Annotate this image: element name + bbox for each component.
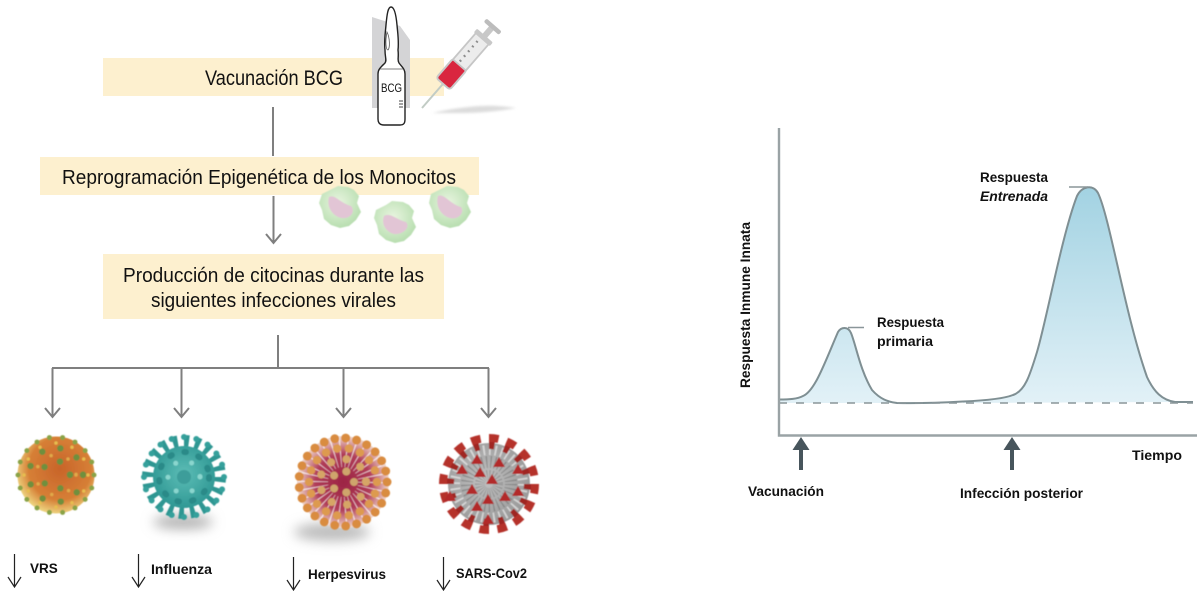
box: Producción de citocinas: siguientes infecciones virales bbox=[151, 290, 396, 312]
chart: innate immune response over time bbox=[738, 128, 1197, 501]
y-axis label: Respuesta Inmune Innata bbox=[738, 222, 753, 388]
label: Herpesvirus bbox=[287, 557, 386, 590]
label: respuesta primaria: primaria bbox=[877, 334, 934, 349]
box: Producción de citocinas: Producción de citocinas durante las bbox=[123, 265, 424, 287]
arrow: reprogramming to cytokines bbox=[266, 196, 281, 243]
label: Herpesvirus: Herpesvirus bbox=[308, 567, 386, 582]
label: tiempo: Tiempo bbox=[1132, 448, 1182, 463]
label: VRS: VRS bbox=[30, 561, 58, 576]
box: Reprogramación Epigenética: Reprogramación Epigenética de los Monocitos bbox=[62, 166, 456, 189]
label: infección posterior: Infección posterior bbox=[960, 486, 1084, 501]
arrow: infección bbox=[1004, 437, 1020, 470]
box: Reprogramación Epigenética bbox=[40, 157, 479, 195]
label: SARS-Cov2 bbox=[437, 557, 527, 590]
label: respuesta entrenada: Respuesta bbox=[980, 170, 1048, 185]
arrow tree: cytokines to viruses bbox=[45, 335, 496, 417]
label: respuesta primaria bbox=[877, 315, 944, 349]
icon: BCG ampoule bbox=[372, 7, 410, 125]
box: Vacunación BCG bbox=[103, 58, 444, 96]
line: response curve bbox=[779, 187, 1193, 403]
leaders: peak ticks bbox=[848, 187, 1088, 328]
icon: VRS virus bbox=[18, 436, 94, 514]
label: vacunación: Vacunación bbox=[748, 484, 824, 499]
box: Vacunación BCG: Vacunación BCG bbox=[205, 67, 343, 90]
icon: monocytes bbox=[319, 186, 471, 243]
icon: SARS-CoV-2 virus bbox=[443, 438, 535, 530]
arrow: vacunación bbox=[792, 437, 810, 470]
area: response under curve bbox=[779, 187, 1175, 403]
label: Influenza bbox=[132, 554, 212, 587]
label: Influenza: Influenza bbox=[151, 562, 212, 577]
label: respuesta primaria: Respuesta bbox=[877, 315, 944, 330]
icon: herpesvirus bbox=[294, 436, 389, 541]
line: baseline bbox=[779, 402, 1193, 404]
icon: influenza virus bbox=[144, 437, 224, 529]
icon: syringe bbox=[414, 18, 516, 115]
label: respuesta entrenada bbox=[980, 170, 1048, 204]
box: Producción de citocinas bbox=[103, 254, 444, 319]
label: SARS-Cov2: SARS-Cov2 bbox=[456, 566, 527, 581]
label: VRS bbox=[8, 554, 58, 587]
connector: BCG to reprogramming bbox=[272, 107, 274, 156]
label: respuesta entrenada: Entrenada bbox=[980, 189, 1048, 204]
axes bbox=[779, 128, 1197, 436]
icon: BCG ampoule: BCG bbox=[381, 81, 402, 95]
